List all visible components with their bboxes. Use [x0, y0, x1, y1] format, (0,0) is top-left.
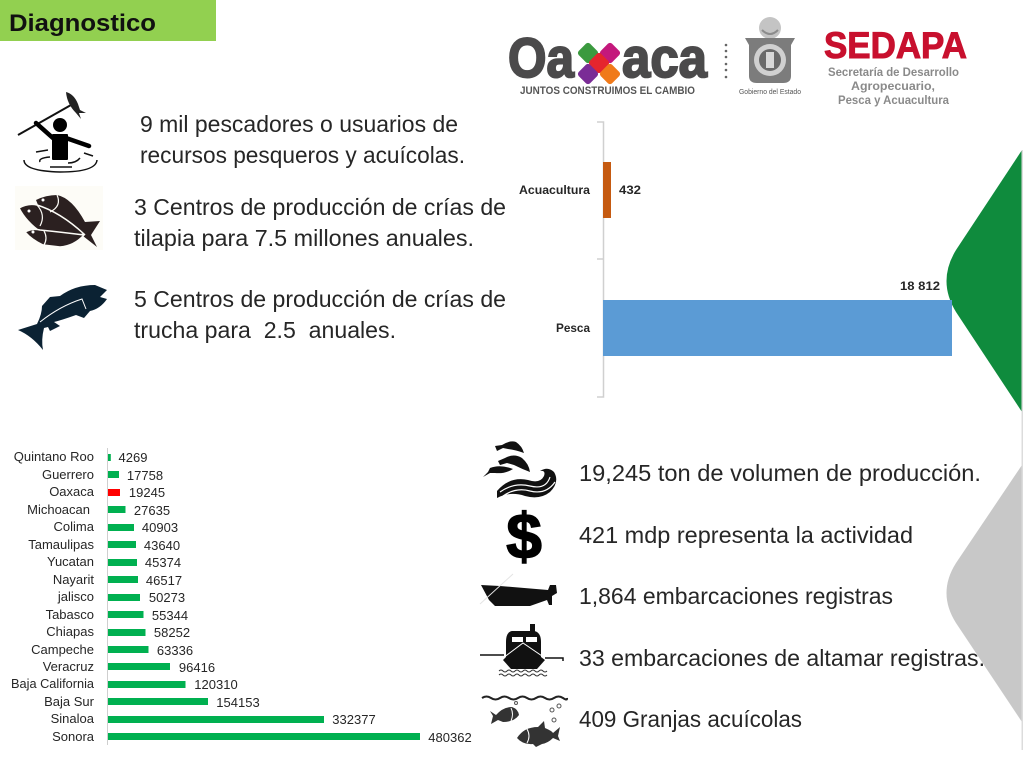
bar chart: production by state: 17758: [127, 468, 163, 483]
text: fish farms: 409 Granjas acuícolas: [579, 706, 802, 732]
text: fishermen: [140, 111, 465, 168]
bar chart: production by state: 45374: [145, 555, 181, 570]
bar chart: production by state: Guerrero: [42, 467, 94, 482]
value: 18 812: 18 812: [900, 279, 940, 293]
text: tilapia centres: tilapia para 7.5 millones anuales.: [134, 225, 474, 251]
icon: dollar sign: $: [506, 500, 542, 572]
logo: Oaxaca: Oa: [508, 26, 575, 89]
icon: fish in water: [482, 696, 567, 747]
icon: small boat: [480, 574, 557, 606]
icon: trout: [18, 285, 107, 350]
text: activity value: 421 mdp representa la actividad: [579, 522, 913, 548]
icon: high-seas vessel: [480, 624, 563, 676]
bar chart: production by state: 154153: [216, 695, 260, 710]
logo: SEDAPA: Pesca y Acuacultura: [838, 93, 949, 107]
text: trout centres: 5 Centros de producción de crías de: [134, 286, 506, 312]
logo: Oaxaca: JUNTOS CONSTRUIMOS EL CAMBIO: [520, 85, 695, 97]
title banner: [0, 0, 216, 41]
bar chart: production by state: Nayarit: [53, 572, 94, 587]
bar chart: production by state: Veracruz: [43, 659, 94, 674]
text: fishermen: recursos pesqueros y acuícolas.: [140, 142, 465, 168]
logo: SEDAPA: Agropecuario,: [851, 79, 935, 93]
bar chart: production by state: Sonora: [52, 729, 95, 744]
bar chart: production by state: Baja California: [11, 676, 95, 691]
icon: fish leaping over wave: [483, 441, 556, 498]
bar chart: production by state: 50273: [149, 590, 185, 605]
icon: tilapia fish group: [15, 186, 103, 250]
text: fishermen: 9 mil pescadores o usuarios de: [140, 111, 458, 137]
bar chart: production by state: 40903: [142, 520, 178, 535]
logo: SEDAPA: SEDAPA: [824, 25, 967, 66]
bar chart: production by state: 58252: [154, 625, 190, 640]
icon: fisherman with spear: [18, 92, 97, 172]
logo: Gobierno del Estado: Gobierno del Estado: [739, 89, 801, 96]
bar chart: production by state: 63336: [157, 643, 193, 658]
bar chart: production by state: 46517: [146, 573, 182, 588]
text: trout centres: trucha para 2.5 anuales.: [134, 317, 396, 343]
bar chart: production by state: Campeche: [31, 642, 94, 657]
bar chart: production by state: 55344: [152, 608, 188, 623]
bar chart: production by state: Oaxaca: [49, 484, 95, 499]
logo: Oaxaca: [508, 26, 708, 97]
logo: SEDAPA: Secretaría de Desarrollo: [828, 65, 959, 79]
bar chart: production by state: 96416: [179, 660, 215, 675]
bar chart: production by state: 120310: [194, 677, 238, 692]
bar: Pesca: [603, 300, 952, 356]
logo: Gobierno del Estado: [739, 17, 801, 96]
bar chart: production by state: jalisco: [57, 589, 94, 604]
logo: SEDAPA: [824, 25, 967, 107]
category label: Acuacultura: Acuacultura: [519, 183, 590, 197]
bar chart: production by state: 4269: [119, 450, 147, 465]
bar chart: production by state: Michoacan: [27, 502, 90, 517]
text: tilapia centres: 3 Centros de producción de crías de: [134, 194, 506, 220]
bar chart: production by state: Chiapas: [46, 624, 94, 639]
bar chart: production by state: Colima: [54, 519, 95, 534]
bar chart: production by state: Tabasco: [46, 607, 94, 622]
text: trout centres: [134, 286, 506, 343]
text: high-seas vessels: 33 embarcaciones de altamar registras.: [579, 645, 985, 671]
bar chart: production by state: Yucatan: [47, 554, 94, 569]
bar chart: production by state: 19245: [129, 485, 165, 500]
bar chart: production by state: 332377: [332, 712, 376, 727]
bar chart: production by state: Baja Sur: [44, 694, 95, 709]
logo: Oaxaca: aca: [622, 26, 708, 89]
text: tilapia centres: [134, 194, 506, 251]
category label: Pesca: Pesca: [556, 321, 590, 335]
bar chart: production by state: 43640: [144, 538, 180, 553]
bar chart: production by state: Sinaloa: [51, 711, 95, 726]
bar chart: production by state: [11, 448, 472, 745]
bar chart: production by state: 27635: [134, 503, 170, 518]
value: 432: 432: [619, 183, 641, 197]
bar chart: production by state: Tamaulipas: [28, 537, 94, 552]
text: production volume: 19,245 ton de volumen de producción.: [579, 460, 981, 486]
text: registered boats: 1,864 embarcaciones registras: [579, 583, 893, 609]
bar chart: acuacultura vs pesca: [519, 122, 952, 397]
bar chart: production by state: Quintano Roo: [14, 449, 94, 464]
bar: Acuacultura: [603, 162, 611, 218]
title banner: Diagnostico: [9, 10, 156, 37]
right edge decorative shapes: [946, 150, 1023, 750]
logo divider dots: [725, 44, 727, 78]
bar chart: production by state: 480362: [428, 730, 472, 745]
